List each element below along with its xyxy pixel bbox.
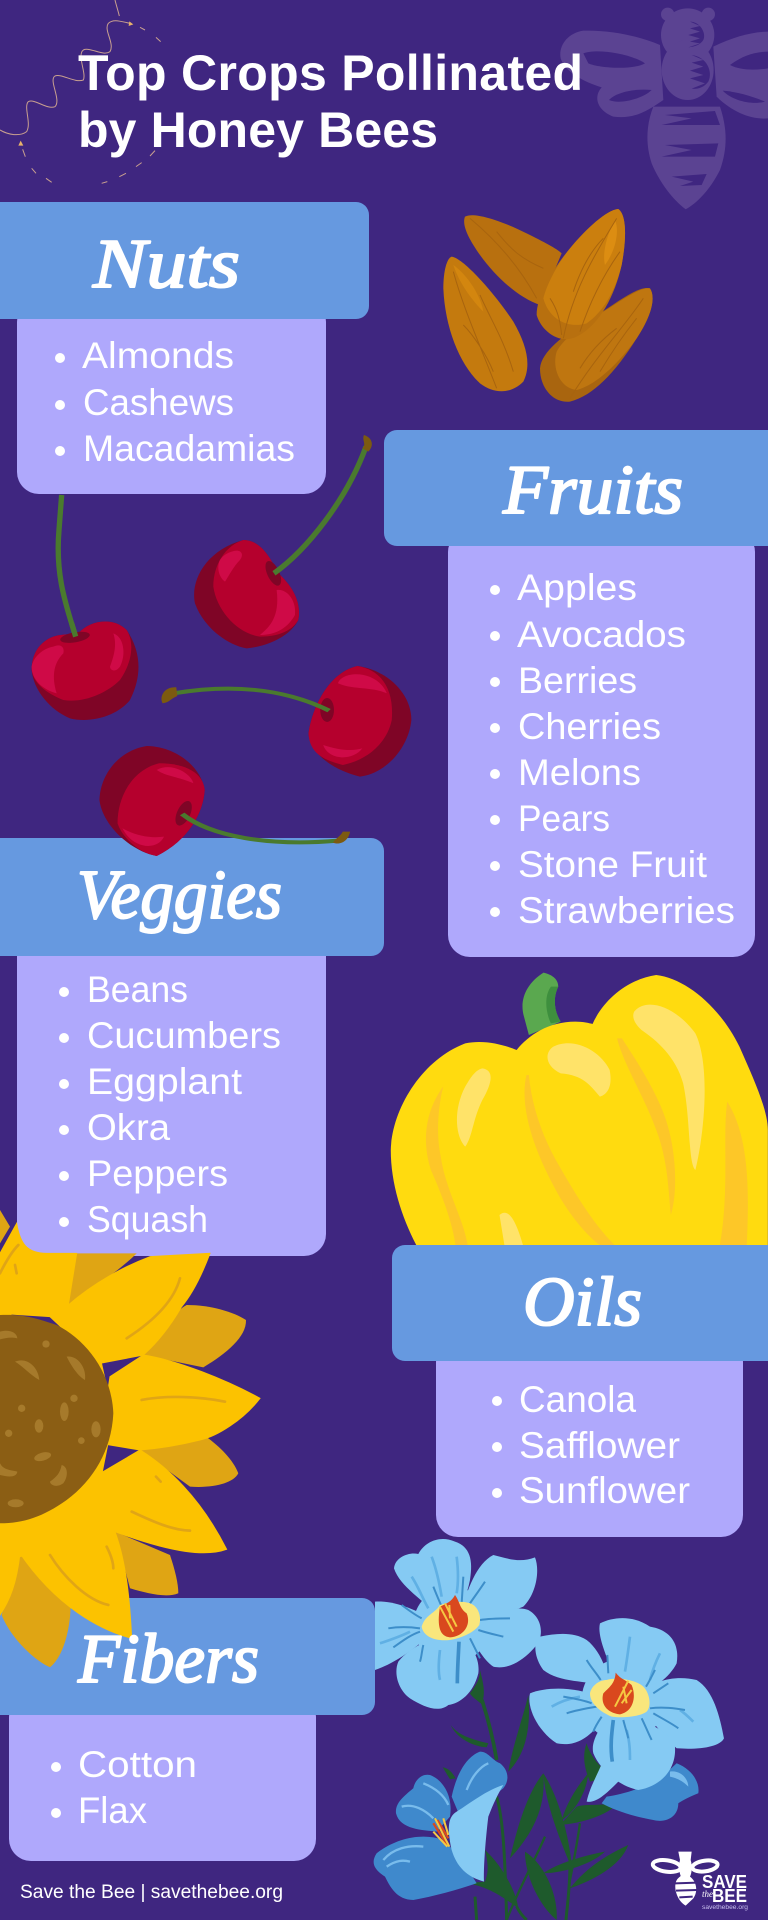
panel: fibers: [0, 1598, 375, 1861]
list: veggies: Beans: [87, 969, 188, 1010]
cherry: left: [32, 495, 138, 720]
heading: fibers: Fibers: [77, 1621, 259, 1698]
panel: nuts: [0, 202, 369, 494]
list: fruits: Pears: [518, 798, 610, 839]
list: veggies: Squash: [87, 1199, 208, 1240]
seed disc: [0, 1315, 113, 1523]
list: fruits: Apples: [517, 567, 637, 608]
icon: logo bee: [652, 1852, 718, 1906]
icon: bee flight trail: [0, 0, 161, 183]
list: oils: Safflower: [519, 1425, 680, 1466]
flower: side view: [374, 1752, 507, 1900]
list: fruits: Cherries: [518, 706, 661, 747]
stems and leaves: [443, 1670, 628, 1920]
panel: oils: [392, 1245, 768, 1537]
footer credit: Save the Bee | savethebee.org: [20, 1882, 283, 1903]
flower: top left: [375, 1539, 541, 1709]
logo: Save the Bee: [652, 1852, 748, 1911]
icon: almonds: [443, 209, 653, 402]
list card: fruits: [448, 530, 755, 957]
logo: Save the Bee: BEE: [712, 1886, 747, 1906]
flower: top right: [529, 1618, 724, 1790]
list: nuts: [55, 335, 295, 469]
header bar: oils: [392, 1245, 768, 1361]
list: fruits: Berries: [518, 660, 637, 701]
front petals: [0, 1223, 260, 1638]
header bar: veggies: [0, 838, 384, 956]
list card: nuts: [17, 300, 326, 494]
petal veins: [0, 1245, 225, 1605]
list: nuts: Cashews: [83, 382, 234, 423]
list: veggies: Okra: [87, 1107, 170, 1148]
title: by Honey Bees: [78, 102, 438, 158]
panel: veggies: [0, 838, 384, 1256]
list: veggies: Eggplant: [87, 1061, 243, 1102]
heading: veggies: Veggies: [77, 857, 282, 934]
list: fibers: Flax: [78, 1790, 147, 1831]
list: nuts: Macadamias: [83, 428, 295, 469]
icon: yellow pepper: [391, 973, 768, 1245]
list: veggies: Peppers: [87, 1153, 228, 1194]
list: fruits: Strawberries: [518, 890, 735, 931]
logo wordmark: SAVE: [702, 1872, 747, 1892]
logo: Save the Bee: savethebee.org: [702, 1904, 748, 1911]
list: fruits: [490, 567, 735, 931]
list: fruits: Melons: [518, 752, 641, 793]
flower: back right: [587, 1760, 699, 1821]
icon: sunflower: [0, 1210, 260, 1667]
heading: oils: Oils: [523, 1264, 642, 1341]
icon: blue flax flowers: [374, 1539, 724, 1920]
cherry: right: [162, 666, 411, 777]
almond: front: [537, 209, 625, 339]
logo: Save the Bee: the: [702, 1889, 713, 1899]
list: veggies: [59, 969, 281, 1240]
cherry: top centre: [194, 435, 372, 648]
panel: fruits: [384, 430, 768, 957]
heading: fruits: Fruits: [502, 452, 683, 529]
almond: back right: [540, 288, 653, 402]
icon: cherries: [32, 435, 411, 777]
seed spots: [0, 1331, 101, 1507]
title: [78, 45, 583, 158]
list: oils: Sunflower: [519, 1470, 690, 1511]
almond: back upper: [464, 215, 562, 305]
list: fruits: Stone Fruit: [518, 844, 708, 885]
list: fibers: Cotton: [78, 1744, 197, 1785]
list card: oils: [436, 1340, 743, 1537]
list: veggies: Cucumbers: [87, 1015, 281, 1056]
header bar: fibers: [0, 1598, 375, 1715]
list: fibers: [51, 1744, 197, 1831]
list: fruits: Avocados: [517, 614, 686, 655]
icon: cherry overlapping veggies header: [99, 746, 350, 856]
list: nuts: Almonds: [82, 335, 234, 376]
almond: left: [443, 257, 527, 391]
list card: veggies: [17, 930, 326, 1256]
almond veins: [453, 218, 643, 398]
title: Top Crops Pollinated: [78, 45, 583, 101]
list: oils: [492, 1379, 690, 1511]
list: oils: Canola: [519, 1379, 636, 1420]
back petals: [0, 1210, 246, 1667]
list card: fibers: [9, 1695, 316, 1861]
header bar: nuts: [0, 202, 369, 319]
icon: bee watermark: [560, 8, 768, 209]
heading: nuts: Nuts: [92, 226, 240, 303]
header bar: fruits: [384, 430, 768, 546]
